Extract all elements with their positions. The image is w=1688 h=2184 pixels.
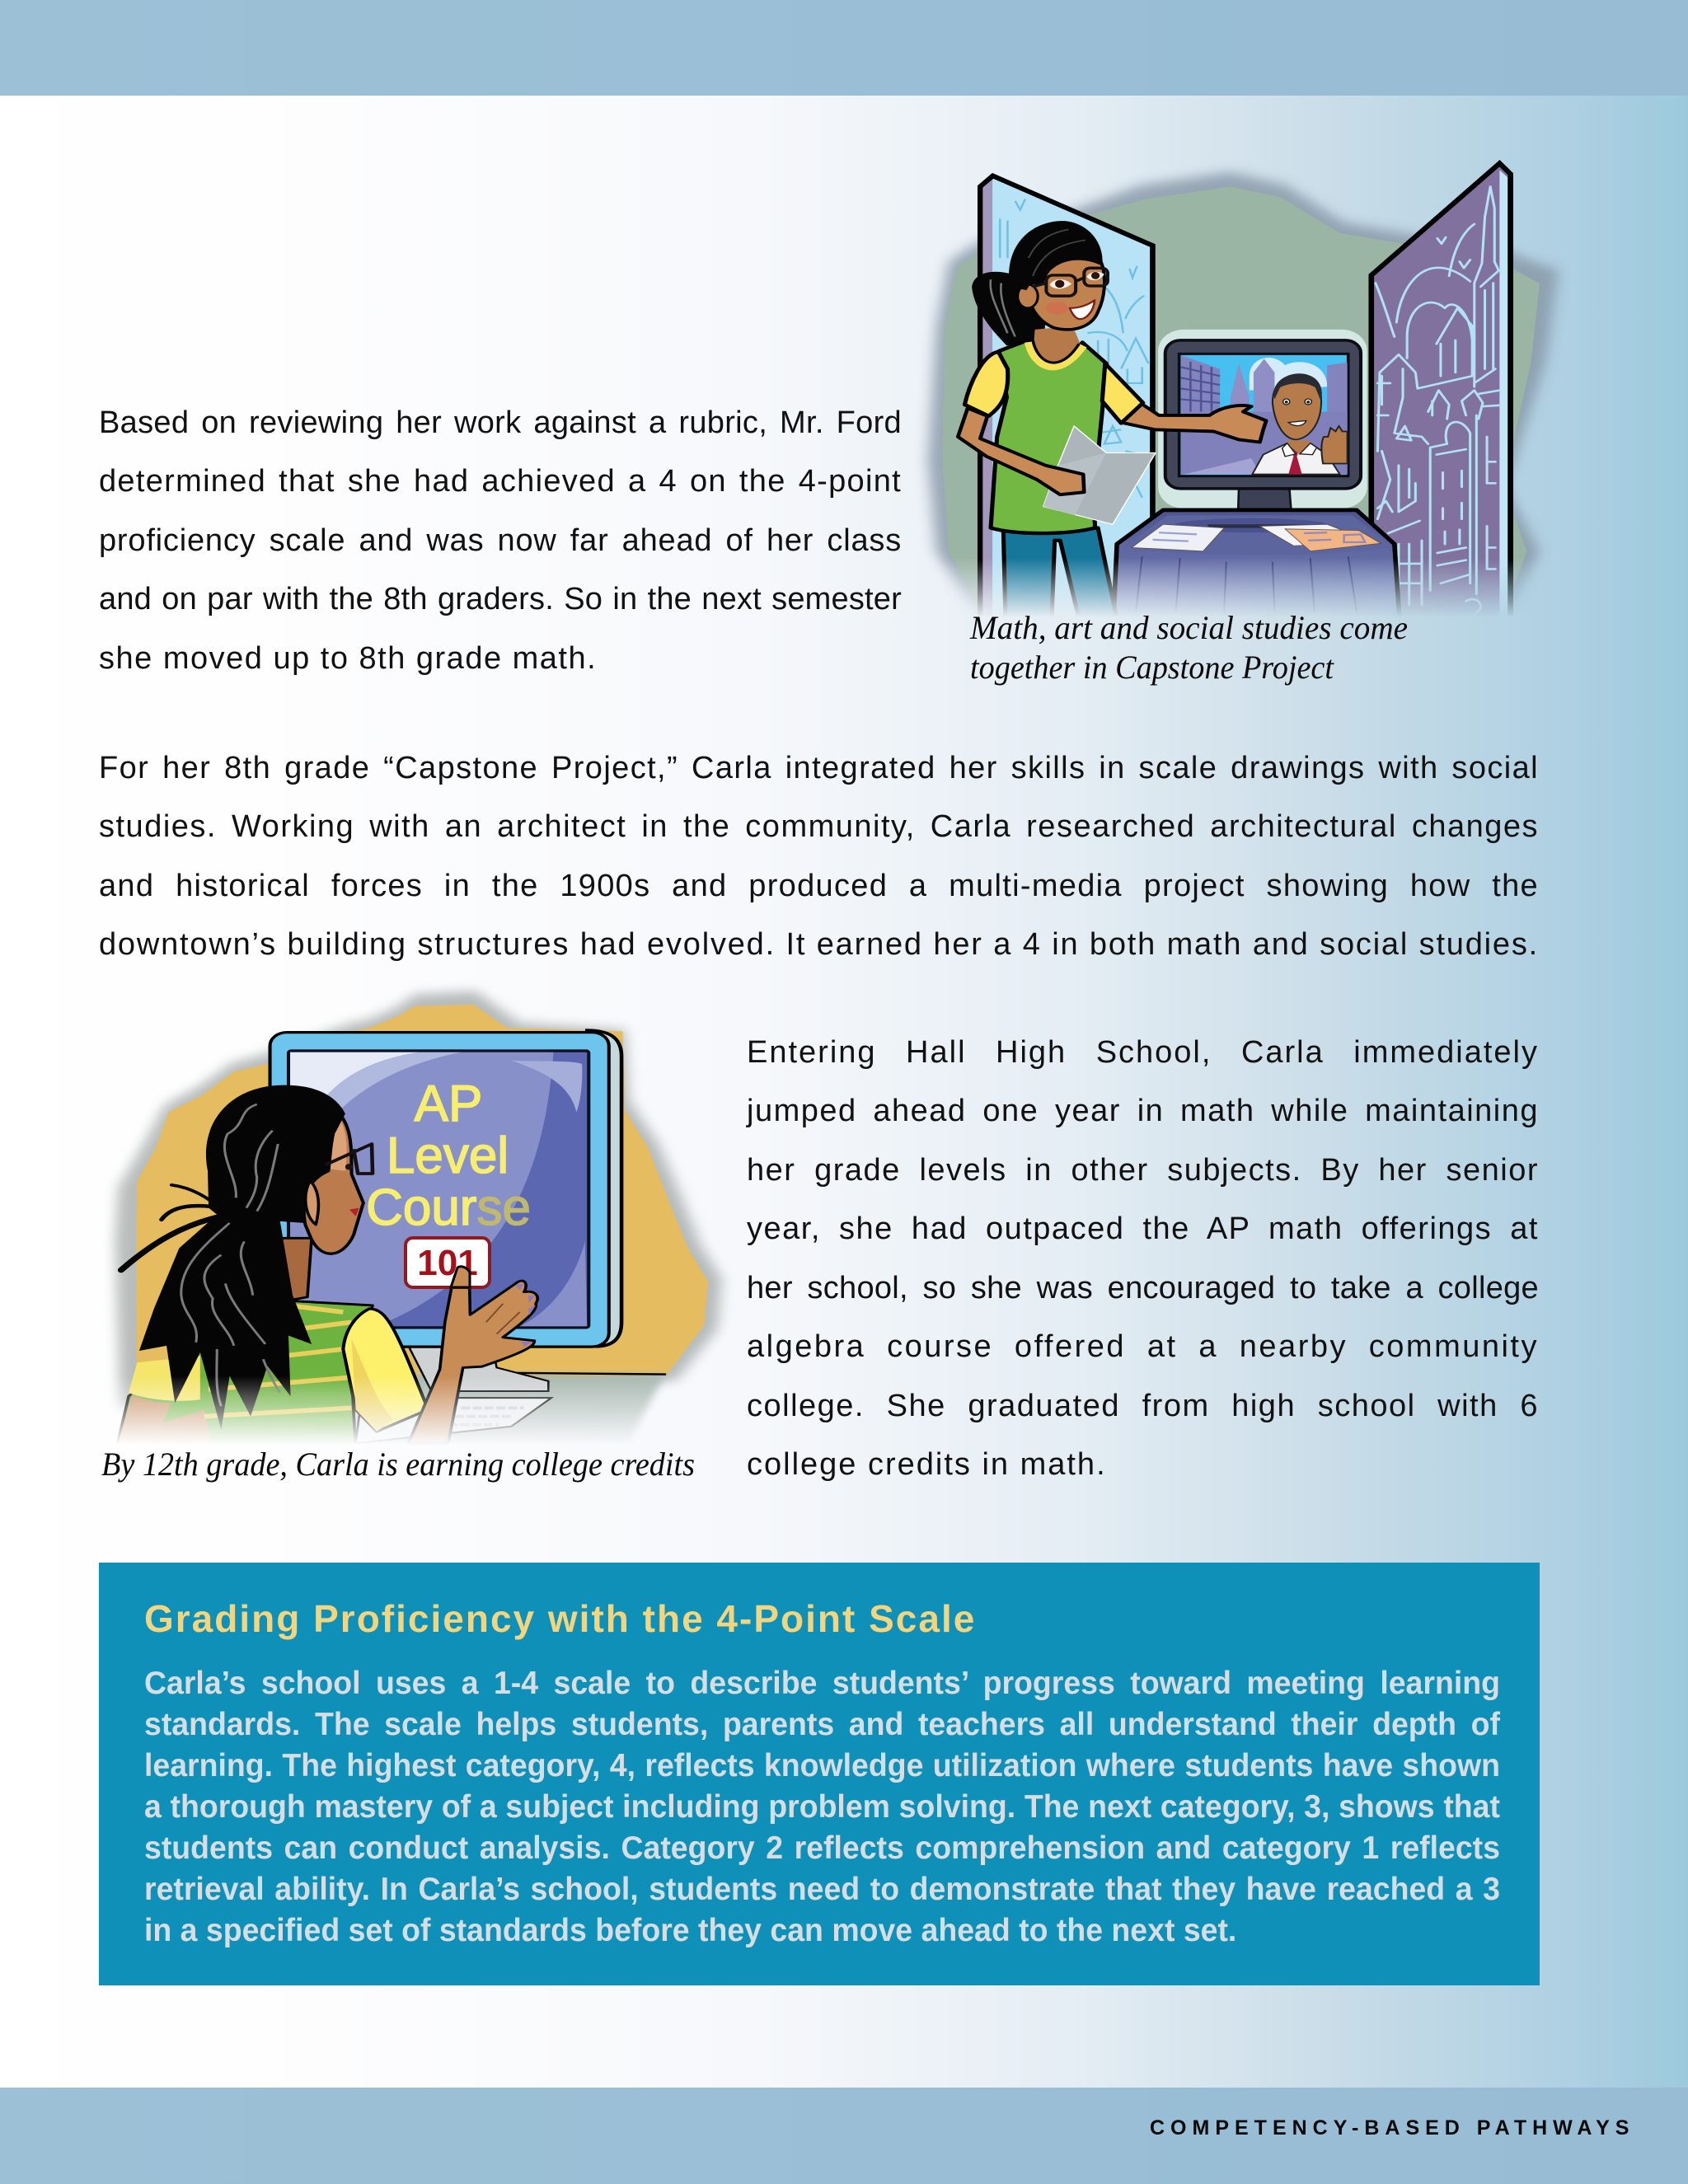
illustration: Carla presenting capstone project	[928, 163, 1559, 619]
man on screen	[1252, 374, 1348, 475]
smile	[1070, 300, 1095, 319]
bottom band	[0, 2088, 1688, 2184]
panel body text: Carla’s school uses a 1-4 scale to describe students’ progress toward meeting learning	[144, 1665, 1500, 1701]
head	[1029, 255, 1104, 330]
paragraph: high school: her grade levels in other subjects. By her senior	[747, 1152, 1539, 1187]
neck	[267, 1238, 312, 1302]
backdrop blob	[928, 172, 1559, 619]
paragraph: rubric result	[99, 405, 902, 676]
monitor stand and keyboard	[356, 1346, 551, 1443]
left arm	[958, 408, 1084, 494]
paragraph: high school: college. She graduated from high school with 6	[747, 1388, 1539, 1422]
glasses	[1033, 268, 1108, 296]
eyes	[1049, 272, 1104, 288]
green shirt	[991, 340, 1106, 533]
ponytail	[972, 272, 1048, 345]
paragraph: capstone project: and historical forces in the 1900s and produced a multi-media project showing how the	[99, 869, 1539, 903]
striped shirt	[116, 1301, 373, 1450]
paragraph: high school: Entering Hall High School, Carla immediately	[747, 1035, 1539, 1070]
panel: grading proficiency	[99, 1563, 1540, 1985]
held paper	[1043, 426, 1156, 524]
lower left arm	[116, 1394, 213, 1450]
left display panel	[980, 176, 1152, 619]
paragraph: capstone project	[99, 750, 1539, 962]
face	[304, 1108, 363, 1254]
right display panel	[1372, 163, 1511, 619]
caption: capstone project: Math, art and social studies come	[969, 609, 1408, 646]
illustration: Carla at AP course screen	[115, 991, 722, 1450]
paragraph: rubric result: determined that she had achieved a 4 on the 4-point	[99, 464, 902, 499]
paragraph: high school: her school, so she was encouraged to take a college	[747, 1271, 1539, 1305]
glasses	[326, 1144, 373, 1174]
draped table with papers	[1114, 510, 1400, 619]
left sleeve	[964, 352, 1008, 416]
video scene	[1181, 355, 1348, 475]
neck	[1034, 328, 1080, 362]
caption: capstone project: together in Capstone Project	[970, 649, 1334, 686]
Carla standing	[958, 221, 1266, 619]
panel heading: Grading Proficiency with the 4-Point Scale	[144, 1597, 976, 1640]
gold backdrop blob	[115, 991, 722, 1409]
paragraph: rubric result: proficiency scale and was now far ahead of her class	[99, 523, 902, 557]
monitor with video call	[1158, 330, 1367, 526]
paragraph: high school: year, she had outpaced the AP math offerings at	[747, 1212, 1539, 1246]
course badge 101: 101	[417, 1243, 478, 1283]
screen text: AP Level Course: AP	[415, 1076, 482, 1132]
top band	[0, 0, 1688, 96]
panel body text	[144, 1665, 1500, 1948]
caption: college credits: By 12th grade, Carla is earning college credits	[101, 1446, 695, 1483]
paragraph: rubric result: Based on reviewing her work against a rubric, Mr. Ford	[99, 405, 902, 440]
hair	[139, 1085, 345, 1430]
screen text: AP Level Course: Course	[366, 1179, 531, 1236]
paragraph: rubric result: she moved up to 8th grade math.	[99, 641, 597, 676]
course badge 101	[406, 1238, 490, 1287]
jeans	[1003, 528, 1117, 619]
forearm and raised hand	[408, 1268, 537, 1443]
paragraph: rubric result: and on par with the 8th graders. So in the next semester	[99, 582, 902, 616]
ground	[356, 1375, 665, 1450]
paragraph: capstone project: studies. Working with an architect in the community, Carla researched architectural changes	[99, 809, 1539, 844]
Carla from behind	[116, 1085, 537, 1450]
panel body text: standards. The scale helps students, parents and teachers all understand their depth of	[144, 1706, 1500, 1742]
paragraph: high school: jumped ahead one year in math while maintaining	[747, 1094, 1539, 1128]
screen text: AP Level Course	[366, 1076, 531, 1236]
panel body text: learning. The highest category, 4, reflects knowledge utilization where students have shown	[144, 1747, 1500, 1783]
right sleeve	[1102, 363, 1143, 423]
paragraph: high school	[746, 1035, 1539, 1482]
caption: capstone project	[969, 609, 1408, 686]
panel body text: in a specified set of standards before they can move ahead to the next set.	[144, 1912, 1236, 1948]
illustrations	[101, 160, 1564, 1482]
hair top	[1009, 221, 1103, 290]
yellow sleeve	[343, 1309, 428, 1432]
paragraph: capstone project: downtown’s building structures had evolved. It earned her a 4 in both math and social studies.	[99, 927, 1539, 962]
paragraph: capstone project: For her 8th grade “Capstone Project,” Carla integrated her skills in scale drawings with social	[99, 750, 1539, 785]
panel body text: a thorough mastery of a subject including problem solving. The next category, 3, shows that	[144, 1788, 1500, 1825]
paragraph: high school: college credits in math.	[747, 1447, 1107, 1482]
paragraph: high school: algebra course offered at a nearby community	[747, 1329, 1539, 1364]
computer monitor	[270, 1030, 621, 1347]
screen text: AP Level Course: Level	[387, 1127, 509, 1184]
panel body text: retrieval ability. In Carla’s school, students need to demonstrate that they have reached a 3	[144, 1871, 1500, 1907]
panel body text: students can conduct analysis. Category 2 reflects comprehension and category 1 reflects	[144, 1830, 1500, 1866]
right arm	[1121, 403, 1266, 442]
footer label: COMPETENCY-BASED PATHWAYS	[1150, 2116, 1634, 2139]
hair locks	[121, 1185, 221, 1270]
